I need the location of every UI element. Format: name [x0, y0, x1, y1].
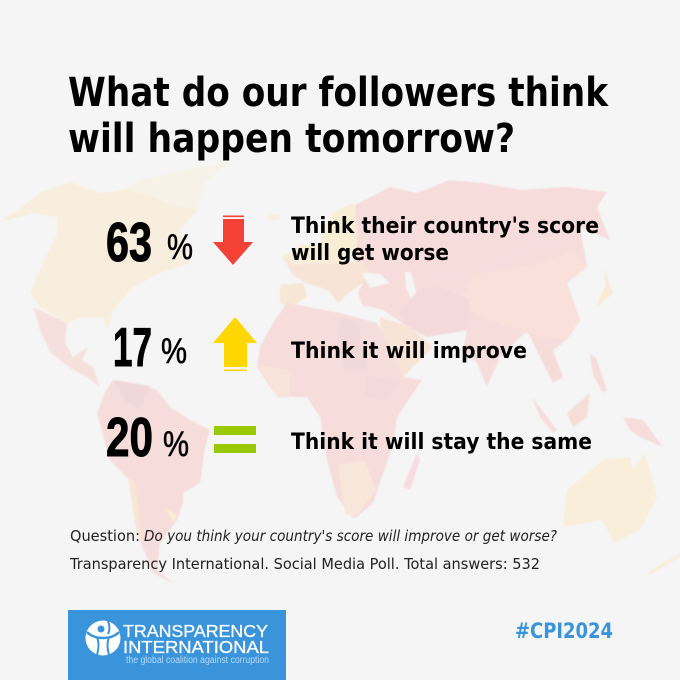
world map background	[0, 162, 680, 583]
label: worse	[291, 213, 599, 266]
north america	[0, 162, 230, 330]
central asia	[400, 287, 470, 337]
russia	[355, 180, 610, 280]
stat 17%: 17	[113, 316, 152, 378]
stat 17%: %	[161, 332, 187, 371]
stat 20%: 20	[106, 406, 153, 468]
question note: Do you think your country's score will improve or get worse?	[144, 527, 557, 545]
caspian sea gap	[405, 272, 418, 300]
africa	[257, 303, 422, 518]
logo wordmark: INTERNATIONAL	[123, 637, 269, 657]
china and mongolia	[463, 250, 587, 340]
iceland	[267, 214, 281, 221]
hashtag: #CPI2024	[515, 619, 613, 643]
scandinavia and northern europe	[283, 203, 357, 263]
australia	[563, 453, 657, 543]
venezuela region	[113, 380, 150, 410]
source note: Transparency International. Social Media Poll. Total answers: 532	[69, 555, 540, 573]
row: 17 percent improve	[113, 316, 527, 378]
icon: yellow up arrow	[213, 317, 257, 371]
spain	[280, 283, 307, 307]
stat 63%: 63	[106, 211, 152, 273]
eurasia base	[355, 233, 587, 350]
uruguay	[165, 508, 177, 522]
icon: green equals	[214, 426, 256, 453]
madagascar	[403, 453, 420, 490]
icon: red down arrow	[213, 216, 253, 265]
east africa shade	[365, 375, 400, 400]
arabia	[380, 317, 433, 377]
central america	[33, 307, 100, 387]
west africa	[258, 365, 290, 396]
logo wordmark: the global coalition against corruption	[126, 655, 269, 666]
logo wordmark	[123, 621, 269, 666]
label: improve: Think it will improve	[291, 338, 527, 364]
philippines	[590, 353, 607, 393]
papua new guinea	[623, 417, 663, 447]
label: worse: will get worse	[291, 240, 449, 266]
row: 20 percent same	[106, 406, 592, 468]
stat 20%: %	[163, 425, 189, 464]
chile strip	[128, 478, 142, 540]
european base	[283, 257, 372, 303]
sumatra	[532, 397, 557, 433]
southern africa	[338, 460, 376, 516]
borneo	[567, 393, 590, 427]
label: same: Think it will stay the same	[291, 429, 592, 455]
title: will happen tomorrow?	[68, 114, 515, 162]
stat 63%: %	[167, 228, 193, 267]
logo panel	[68, 610, 286, 680]
question note: Question:	[70, 527, 140, 545]
black sea gap	[362, 273, 390, 288]
icon: logo globe	[86, 620, 120, 656]
central africa shade	[338, 317, 368, 370]
row: 63 percent worse	[106, 211, 599, 273]
label: worse: Think their country's score	[291, 213, 599, 239]
new zealand	[647, 553, 680, 575]
india	[463, 327, 527, 387]
south america	[97, 380, 210, 583]
japan	[597, 267, 613, 307]
logo wordmark: TRANSPARENCY	[123, 621, 268, 641]
arctic canada and greenland	[123, 162, 230, 210]
title	[68, 68, 609, 162]
southeast asia	[527, 330, 563, 383]
